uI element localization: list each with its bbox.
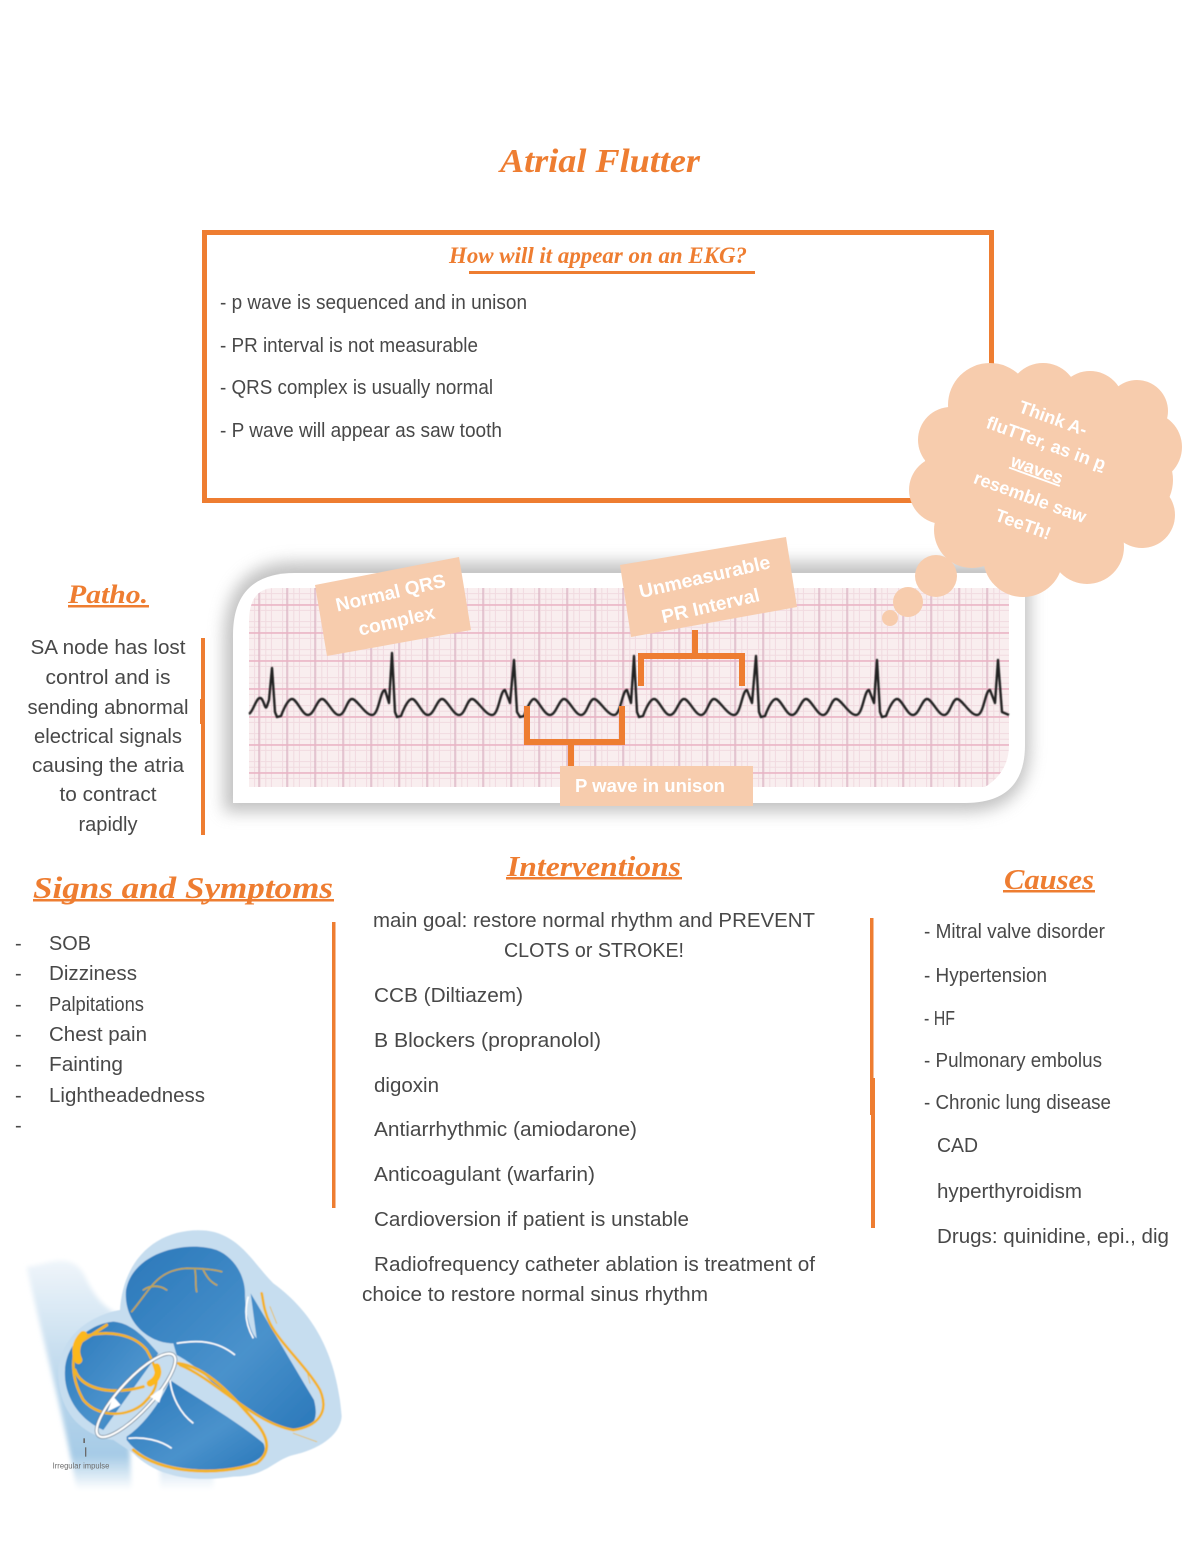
heading: causes: Causes <box>1004 865 1094 896</box>
text block: interventions list <box>362 910 815 1306</box>
text: bubble note: TeeTh! <box>993 505 1054 544</box>
text block: symptoms list: Chest pain <box>49 1024 147 1046</box>
text block: interventions list: CLOTS or STROKE! <box>504 940 684 962</box>
text block: symptoms list: - <box>15 1024 22 1046</box>
text block: interventions list: Radiofrequency catheter ablation is treatment of <box>374 1254 815 1276</box>
text block: interventions list: choice to restore normal sinus rhythm <box>362 1284 708 1306</box>
panel: interventions <box>362 852 815 1306</box>
text block: patho description: SA node has lost <box>30 637 186 659</box>
text block: symptoms list: - <box>15 1054 22 1076</box>
text block: causes list: - Mitral valve disorder <box>924 921 1105 943</box>
text: bubble note: fluTTer, as in p <box>984 412 1109 474</box>
text block: symptoms list: - <box>15 1085 22 1107</box>
text block: causes list: Drugs: quinidine, epi., dig <box>937 1226 1169 1248</box>
text block: symptoms list: SOB <box>49 933 91 955</box>
text block: symptoms list: - <box>15 994 22 1016</box>
bracket: P wave in unison <box>527 706 622 768</box>
text block: causes list: - Pulmonary embolus <box>924 1050 1102 1072</box>
thought bubble <box>882 363 1182 626</box>
text block: interventions list: Anticoagulant (warfarin) <box>374 1164 595 1186</box>
text block: symptoms list: - <box>15 933 22 955</box>
text: bubble note: waves <box>1007 450 1066 488</box>
panel: EKG strip <box>224 537 1030 812</box>
text block: causes list: hyperthyroidism <box>937 1181 1082 1203</box>
heading: patho: Patho. <box>67 580 148 609</box>
text block: patho description: causing the atria <box>32 755 185 777</box>
text block: interventions list: B Blockers (propranolol) <box>374 1030 601 1052</box>
text: bubble note: resemble saw <box>971 468 1090 527</box>
callout: P wave in unison: P wave in unison <box>575 776 725 796</box>
text block: symptoms list: - <box>15 963 22 985</box>
text block: causes list: - HF <box>924 1008 955 1030</box>
text block: causes list: CAD <box>937 1135 978 1157</box>
text block: interventions list: Cardioversion if patient is unstable <box>374 1209 689 1231</box>
text block: patho description: control and is <box>46 667 170 689</box>
text block: interventions list: digoxin <box>374 1075 439 1097</box>
bracket: unmeasurable PR interval <box>641 630 742 686</box>
callout: unmeasurable PR interval: Unmeasurable <box>637 552 772 603</box>
title: Atrial Flutter <box>498 143 701 180</box>
callout: P wave in unison <box>560 766 753 806</box>
text block: symptoms list: Dizziness <box>49 963 137 985</box>
text block: symptoms list <box>15 933 205 1137</box>
label: impulse caption: Irregular impulse <box>53 1462 110 1471</box>
text block: EKG findings: - p wave is sequenced and in unison <box>220 292 527 314</box>
text block: EKG findings: - PR interval is not measurable <box>220 335 478 357</box>
text block: EKG findings: - QRS complex is usually normal <box>220 377 493 399</box>
label: impulse caption <box>53 1438 110 1471</box>
chart: EKG paper grid <box>249 588 1009 787</box>
callout: unmeasurable PR interval <box>620 537 797 637</box>
panel: signs and symptoms <box>15 870 336 1208</box>
callout: unmeasurable PR interval: PR Interval <box>660 585 762 628</box>
text block: symptoms list: Palpitations <box>49 994 144 1016</box>
text block: EKG findings <box>220 292 527 442</box>
text block: patho description: sending abnormal <box>28 697 188 719</box>
panel: causes <box>870 865 1169 1248</box>
text: bubble note: Think A- <box>1016 397 1090 440</box>
text block: interventions list: main goal: restore normal rhythm and PREVENT <box>373 910 815 932</box>
callout: normal QRS complex: complex <box>356 603 438 641</box>
text block: patho description: to contract <box>60 784 157 806</box>
chart: EKG trace <box>249 653 1009 717</box>
text: bubble note <box>971 397 1109 544</box>
heading: EKG appearance: How will it appear on an EKG? <box>448 243 747 268</box>
callout: normal QRS complex: Normal QRS <box>334 571 448 616</box>
text block: causes list: - Chronic lung disease <box>924 1092 1111 1114</box>
text block: symptoms list: Lightheadedness <box>49 1085 205 1107</box>
text block: patho description: electrical signals <box>34 726 182 748</box>
text block: causes list: - Hypertension <box>924 965 1047 987</box>
panel: patho <box>28 580 205 836</box>
text block: causes list <box>924 921 1169 1248</box>
callout: normal QRS complex <box>315 557 471 656</box>
text block: patho description <box>28 637 188 836</box>
text block: interventions list: CCB (Diltiazem) <box>374 985 523 1007</box>
heading: interventions: Interventions <box>506 852 681 883</box>
illustration: heart conduction <box>27 1230 342 1490</box>
text block: symptoms list: - <box>15 1115 22 1137</box>
text block: EKG findings: - P wave will appear as saw tooth <box>220 420 502 442</box>
text block: symptoms list: Fainting <box>49 1054 123 1076</box>
text block: patho description: rapidly <box>78 814 138 836</box>
heading: signs and symptoms: Signs and Symptoms <box>33 870 333 905</box>
text block: interventions list: Antiarrhythmic (amiodarone) <box>374 1119 637 1141</box>
panel: how it appears on an EKG <box>204 232 992 500</box>
